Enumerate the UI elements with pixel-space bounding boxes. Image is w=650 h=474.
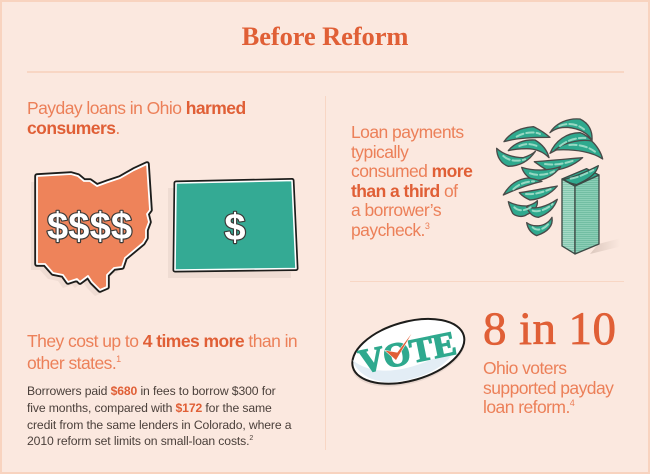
text: cost comparison: They cost up to 4 times more than in bbox=[27, 331, 297, 351]
icon: vote sticker bbox=[344, 307, 472, 398]
icon: Ohio map bbox=[31, 164, 150, 296]
icon: flying money and stack bbox=[497, 119, 620, 254]
text: borrower detail bbox=[27, 384, 292, 448]
heading: payday loans: consumers. bbox=[27, 118, 120, 138]
text: cost comparison bbox=[27, 331, 297, 373]
text: borrower detail: Borrowers paid $680 in fees to borrow $300 for bbox=[27, 384, 276, 398]
text: loan payments: paycheck.3 bbox=[351, 220, 429, 240]
dollar sign: one: $ bbox=[224, 207, 246, 249]
heading: payday loans: Payday loans in Ohio harmed bbox=[27, 98, 246, 118]
text: voters bbox=[483, 358, 614, 417]
check mark bbox=[385, 334, 411, 360]
text: voters: supported payday bbox=[483, 378, 613, 398]
text: borrower detail: credit from the same lenders in Colorado, where a bbox=[27, 418, 291, 432]
text: loan payments: typically bbox=[351, 142, 408, 162]
heading: payday loans bbox=[27, 98, 246, 138]
text: loan payments: than a third of bbox=[351, 181, 458, 201]
dollar signs: four: $$$$ bbox=[47, 206, 132, 248]
header rule bbox=[27, 71, 624, 73]
icon: Colorado map bbox=[168, 180, 296, 278]
text: voters: loan reform.4 bbox=[483, 397, 574, 417]
stack of bills bbox=[562, 166, 599, 254]
text: loan payments: a borrower’s bbox=[351, 200, 441, 220]
stat: 8 in 10: 8 in 10 bbox=[483, 303, 616, 355]
icon: vote sticker: VOTE bbox=[356, 325, 459, 381]
right column divider bbox=[350, 281, 624, 282]
text: voters: Ohio voters bbox=[483, 358, 566, 378]
text: loan payments: Loan payments bbox=[351, 122, 464, 142]
text: borrower detail: five months, compared with $172 for the same bbox=[27, 401, 272, 415]
text: borrower detail: 2010 reform set limits on small-loan costs.2 bbox=[27, 434, 253, 448]
text: loan payments bbox=[351, 122, 472, 240]
column divider bbox=[325, 96, 326, 450]
text: cost comparison: other states.1 bbox=[27, 353, 121, 373]
title: Before Reform bbox=[242, 21, 408, 51]
text: loan payments: consumed more bbox=[351, 161, 472, 181]
